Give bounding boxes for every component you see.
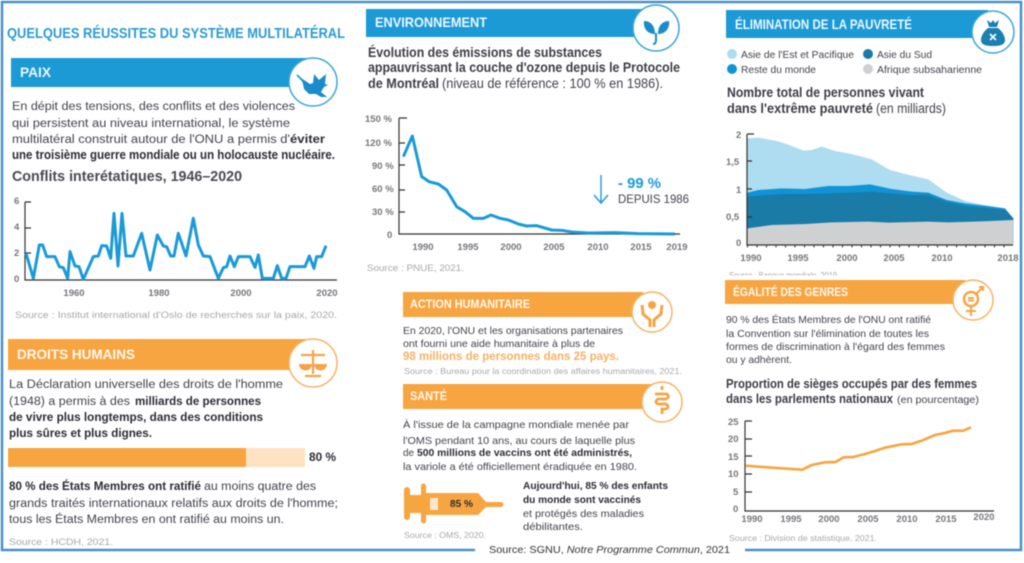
sante source: Source : OMS, 2020. xyxy=(404,530,486,540)
callout: -99 %: DEPUIS 1986 xyxy=(618,192,689,206)
vaccination text: du monde sont vaccinés xyxy=(523,494,641,506)
legend xyxy=(727,49,982,76)
egalite chart heading: dans les parlements nationaux xyxy=(726,392,893,406)
line chart: women in parliament: 15 xyxy=(728,452,739,463)
pauvrete source (clipped): Source : Banque mondiale, 2019. xyxy=(729,270,839,280)
panel: action humanitaire xyxy=(403,292,682,376)
paix source: Source : Institut international d'Oslo de recherches sur la paix, 2020. xyxy=(15,310,337,321)
line chart: women in parliament: 1990 xyxy=(741,514,763,525)
vaccination text: Aujourd'hui, 85 % des enfants xyxy=(523,480,668,492)
line chart: ozone: 120 % xyxy=(365,138,392,149)
icon: dove xyxy=(289,58,337,106)
pauvrete chart heading: Nombre total de personnes vivant xyxy=(727,85,924,100)
line chart: conflicts: 0 xyxy=(14,274,19,285)
paix text: qui persistent au niveau international, le système xyxy=(12,118,290,130)
icon: scales xyxy=(289,339,337,387)
icon: hands xyxy=(632,292,672,332)
area chart: poverty: 1 xyxy=(736,185,742,196)
paix text: éviter xyxy=(290,134,326,146)
droits humains details: au moins quatre des xyxy=(204,481,316,493)
line chart: conflicts xyxy=(14,196,338,299)
icon: caduceus snake xyxy=(642,382,682,422)
legend: Afrique subsaharienne xyxy=(877,65,982,76)
line chart: ozone: 60 % xyxy=(372,184,394,195)
progress bar 80 %: 80 % xyxy=(309,450,336,464)
panel: egalite des genres xyxy=(725,280,995,543)
line chart: women in parliament: 2000 xyxy=(818,514,840,525)
line chart: women in parliament: 5 xyxy=(733,487,739,498)
pauvrete chart heading xyxy=(727,85,946,116)
line chart: ozone: 2010 xyxy=(587,242,609,253)
line chart: conflicts: 6 xyxy=(14,196,19,207)
environnement description: de Montréal xyxy=(368,75,439,91)
action humanitaire header bar xyxy=(403,292,643,317)
droits humains text: milliards de personnes xyxy=(135,396,261,408)
panel: elimination de la pauvrete xyxy=(725,10,1019,280)
action humanitaire text: En 2020, l'ONU et les organisations partenaires xyxy=(403,325,623,337)
environnement description: Évolution des émissions de substances xyxy=(368,44,602,60)
area chart: poverty: 2018 xyxy=(997,253,1019,264)
line chart: women in parliament: 20 xyxy=(728,434,739,445)
area chart: poverty: 1995 xyxy=(787,253,809,264)
callout: -99 %: - 99 % xyxy=(618,175,661,192)
panel: environnement xyxy=(365,5,689,274)
line chart: ozone: 1995 xyxy=(457,242,479,253)
line chart: conflicts: 4 xyxy=(14,222,20,233)
environnement header bar xyxy=(366,9,651,37)
vaccination text xyxy=(523,480,668,533)
line chart: conflicts: 2000 xyxy=(230,288,252,299)
line chart: ozone: 2000 xyxy=(500,242,522,253)
droits humains source: Source : HCDH, 2021. xyxy=(9,537,113,548)
droits humains text: La Déclaration universelle des droits de l'homme xyxy=(9,379,283,391)
sante header bar xyxy=(403,384,653,409)
pauvrete chart heading: (en milliards) xyxy=(876,101,946,116)
icon: money bag xyxy=(972,11,1014,53)
paix text: multilatéral construit autour de l'ONU a permis d' xyxy=(12,134,290,146)
paix text: une troisième guerre mondiale ou un holocauste nucléaire. xyxy=(12,148,335,162)
egalite text: formes de discrimination à l'égard des femmes xyxy=(726,341,945,353)
environnement source: Source : PNUE, 2021. xyxy=(367,263,464,274)
line chart: ozone: 1990 xyxy=(412,242,434,253)
area chart: poverty: 1,5 xyxy=(726,157,740,168)
egalite text: la Convention sur l'élimination de toutes les xyxy=(726,328,929,340)
line chart: women in parliament: 2005 xyxy=(857,514,879,525)
vaccination text: et protégés des maladies xyxy=(523,508,644,520)
action humanitaire text: ont fourni une aide humanitaire à plus de xyxy=(403,338,595,350)
egalite text: 90 % des États Membres de l'ONU ont ratifié xyxy=(726,313,931,326)
paix text xyxy=(12,101,335,162)
panel: droits humains xyxy=(8,339,338,548)
area chart: poverty: 1990 xyxy=(740,253,762,264)
area chart: poverty: 2005 xyxy=(883,253,905,264)
line chart: women in parliament xyxy=(728,417,995,525)
panel: sante xyxy=(403,382,682,540)
conflicts chart heading: Conflits interétatiques, 1946–2020 xyxy=(12,168,242,185)
droits humains text: (1948) a permis à des xyxy=(9,396,130,408)
action humanitaire text: 98 millions de personnes dans 25 pays. xyxy=(403,349,619,363)
paix heading: PAIX xyxy=(20,64,52,80)
line chart: conflicts: 2020 xyxy=(316,288,338,299)
sante text: la variole a été officiellement éradiquée en 1980. xyxy=(403,461,637,473)
pauvrete chart heading: dans l'extrême pauvreté xyxy=(727,101,873,116)
line chart: ozone: 2019 xyxy=(666,242,688,253)
area chart: poverty: 0,5 xyxy=(726,212,740,223)
area chart: poverty: 2000 xyxy=(836,253,858,264)
icon: syringe 85 % xyxy=(404,484,504,524)
icon: gender symbol xyxy=(953,280,993,320)
arrow: decrease xyxy=(594,175,608,203)
sante text: 500 millions de vaccins ont été administrés, xyxy=(417,447,632,459)
egalite heading: ÉGALITÉ DES GENRES xyxy=(733,284,848,299)
legend: Asie de l'Est et Pacifique xyxy=(741,50,854,61)
line chart: ozone: 30 % xyxy=(372,207,394,218)
droits humains details: grands traités internationaux relatifs aux droits de l'homme; xyxy=(9,498,338,510)
droits humains header bar xyxy=(8,339,306,370)
icon: sprout xyxy=(633,5,679,51)
line chart: women in parliament: 0 xyxy=(733,504,738,515)
droits humains details: tous les États Membres en ont ratifié au moins un. xyxy=(9,513,284,526)
egalite text: ou y adhèrent. xyxy=(726,354,792,366)
footer source: Source: SGNU, Notre Programme Commun , 2021 xyxy=(489,544,730,556)
panel: paix xyxy=(11,58,338,321)
area chart: poverty xyxy=(726,130,1019,264)
line chart: women in parliament: 10 xyxy=(728,469,739,480)
egalite header bar xyxy=(725,280,965,304)
droits humains text: plus sûres et plus dignes. xyxy=(9,428,152,440)
sante text: de xyxy=(403,447,414,459)
environnement description: (niveau de référence : 100 % en 1986). xyxy=(442,75,663,91)
sante text xyxy=(403,418,637,473)
droits humains text xyxy=(9,379,283,440)
line chart: ozone: 0 xyxy=(387,230,392,241)
line chart: conflicts: 1960 xyxy=(63,288,85,299)
title: QUELQUES RÉUSSITES DU SYSTÈME MULTILATÉRAL xyxy=(7,25,345,42)
paix text: En dépit des tensions, des conflits et des violences xyxy=(12,101,295,113)
line chart: women in parliament: 2020 xyxy=(973,512,995,523)
environnement heading: ENVIRONNEMENT xyxy=(375,14,487,30)
legend: Reste du monde xyxy=(741,65,816,76)
sante text: À l'issue de la campagne mondiale menée par xyxy=(403,418,630,431)
progress bar 80 % xyxy=(8,448,336,467)
line chart: ozone: 150 % xyxy=(365,114,392,125)
egalite chart heading xyxy=(726,377,979,406)
line chart: ozone: 2005 xyxy=(543,242,565,253)
area chart: poverty: 0 xyxy=(736,238,741,249)
action humanitaire source: Source : Bureau pour la coordination des affaires humanitaires, 2021. xyxy=(404,366,682,376)
line chart: women in parliament: 25 xyxy=(728,417,739,428)
pauvrete heading: ÉLIMINATION DE LA PAUVRETÉ xyxy=(735,16,912,32)
action humanitaire text xyxy=(403,325,623,363)
line chart: conflicts: 2 xyxy=(14,248,19,259)
egalite chart heading: (en pourcentage) xyxy=(897,395,979,406)
action humanitaire heading: ACTION HUMANITAIRE xyxy=(410,297,530,311)
area chart: poverty: 2 xyxy=(736,130,741,141)
droits humains details xyxy=(9,480,338,526)
egalite chart heading: Proportion de sièges occupés par des femmes xyxy=(726,377,977,391)
environnement description: appauvrissant la couche d'ozone depuis le Protocole xyxy=(368,59,680,75)
line chart: women in parliament: 2015 xyxy=(935,514,957,525)
paix header bar xyxy=(11,58,306,87)
pauvrete header bar xyxy=(726,10,988,38)
legend: Asie du Sud xyxy=(877,50,932,61)
sante heading: SANTÉ xyxy=(410,388,447,403)
line chart: women in parliament: 1995 xyxy=(780,514,802,525)
sante text: l'OMS pendant 10 ans, au cours de laquelle plus xyxy=(403,435,635,447)
egalite source: Source : Division de statistique, 2021. xyxy=(729,533,877,543)
droits humains heading: DROITS HUMAINS xyxy=(17,346,135,362)
line chart: women in parliament: 2010 xyxy=(896,514,918,525)
line chart: conflicts: 1980 xyxy=(148,288,170,299)
line chart: ozone: 2015 xyxy=(630,242,652,253)
icon: syringe 85 %: 85 % xyxy=(450,498,474,510)
vaccination text: débilitantes. xyxy=(523,521,583,533)
environnement description xyxy=(368,44,680,91)
callout: -99 % xyxy=(618,175,689,206)
droits humains details: 80 % des États Membres ont ratifié xyxy=(9,480,201,493)
line chart: ozone: 90 % xyxy=(372,161,394,172)
line chart: ozone xyxy=(365,114,688,253)
egalite text xyxy=(726,313,945,366)
area chart: poverty: 2010 xyxy=(931,253,953,264)
droits humains text: de vivre plus longtemps, dans des conditions xyxy=(9,412,263,424)
